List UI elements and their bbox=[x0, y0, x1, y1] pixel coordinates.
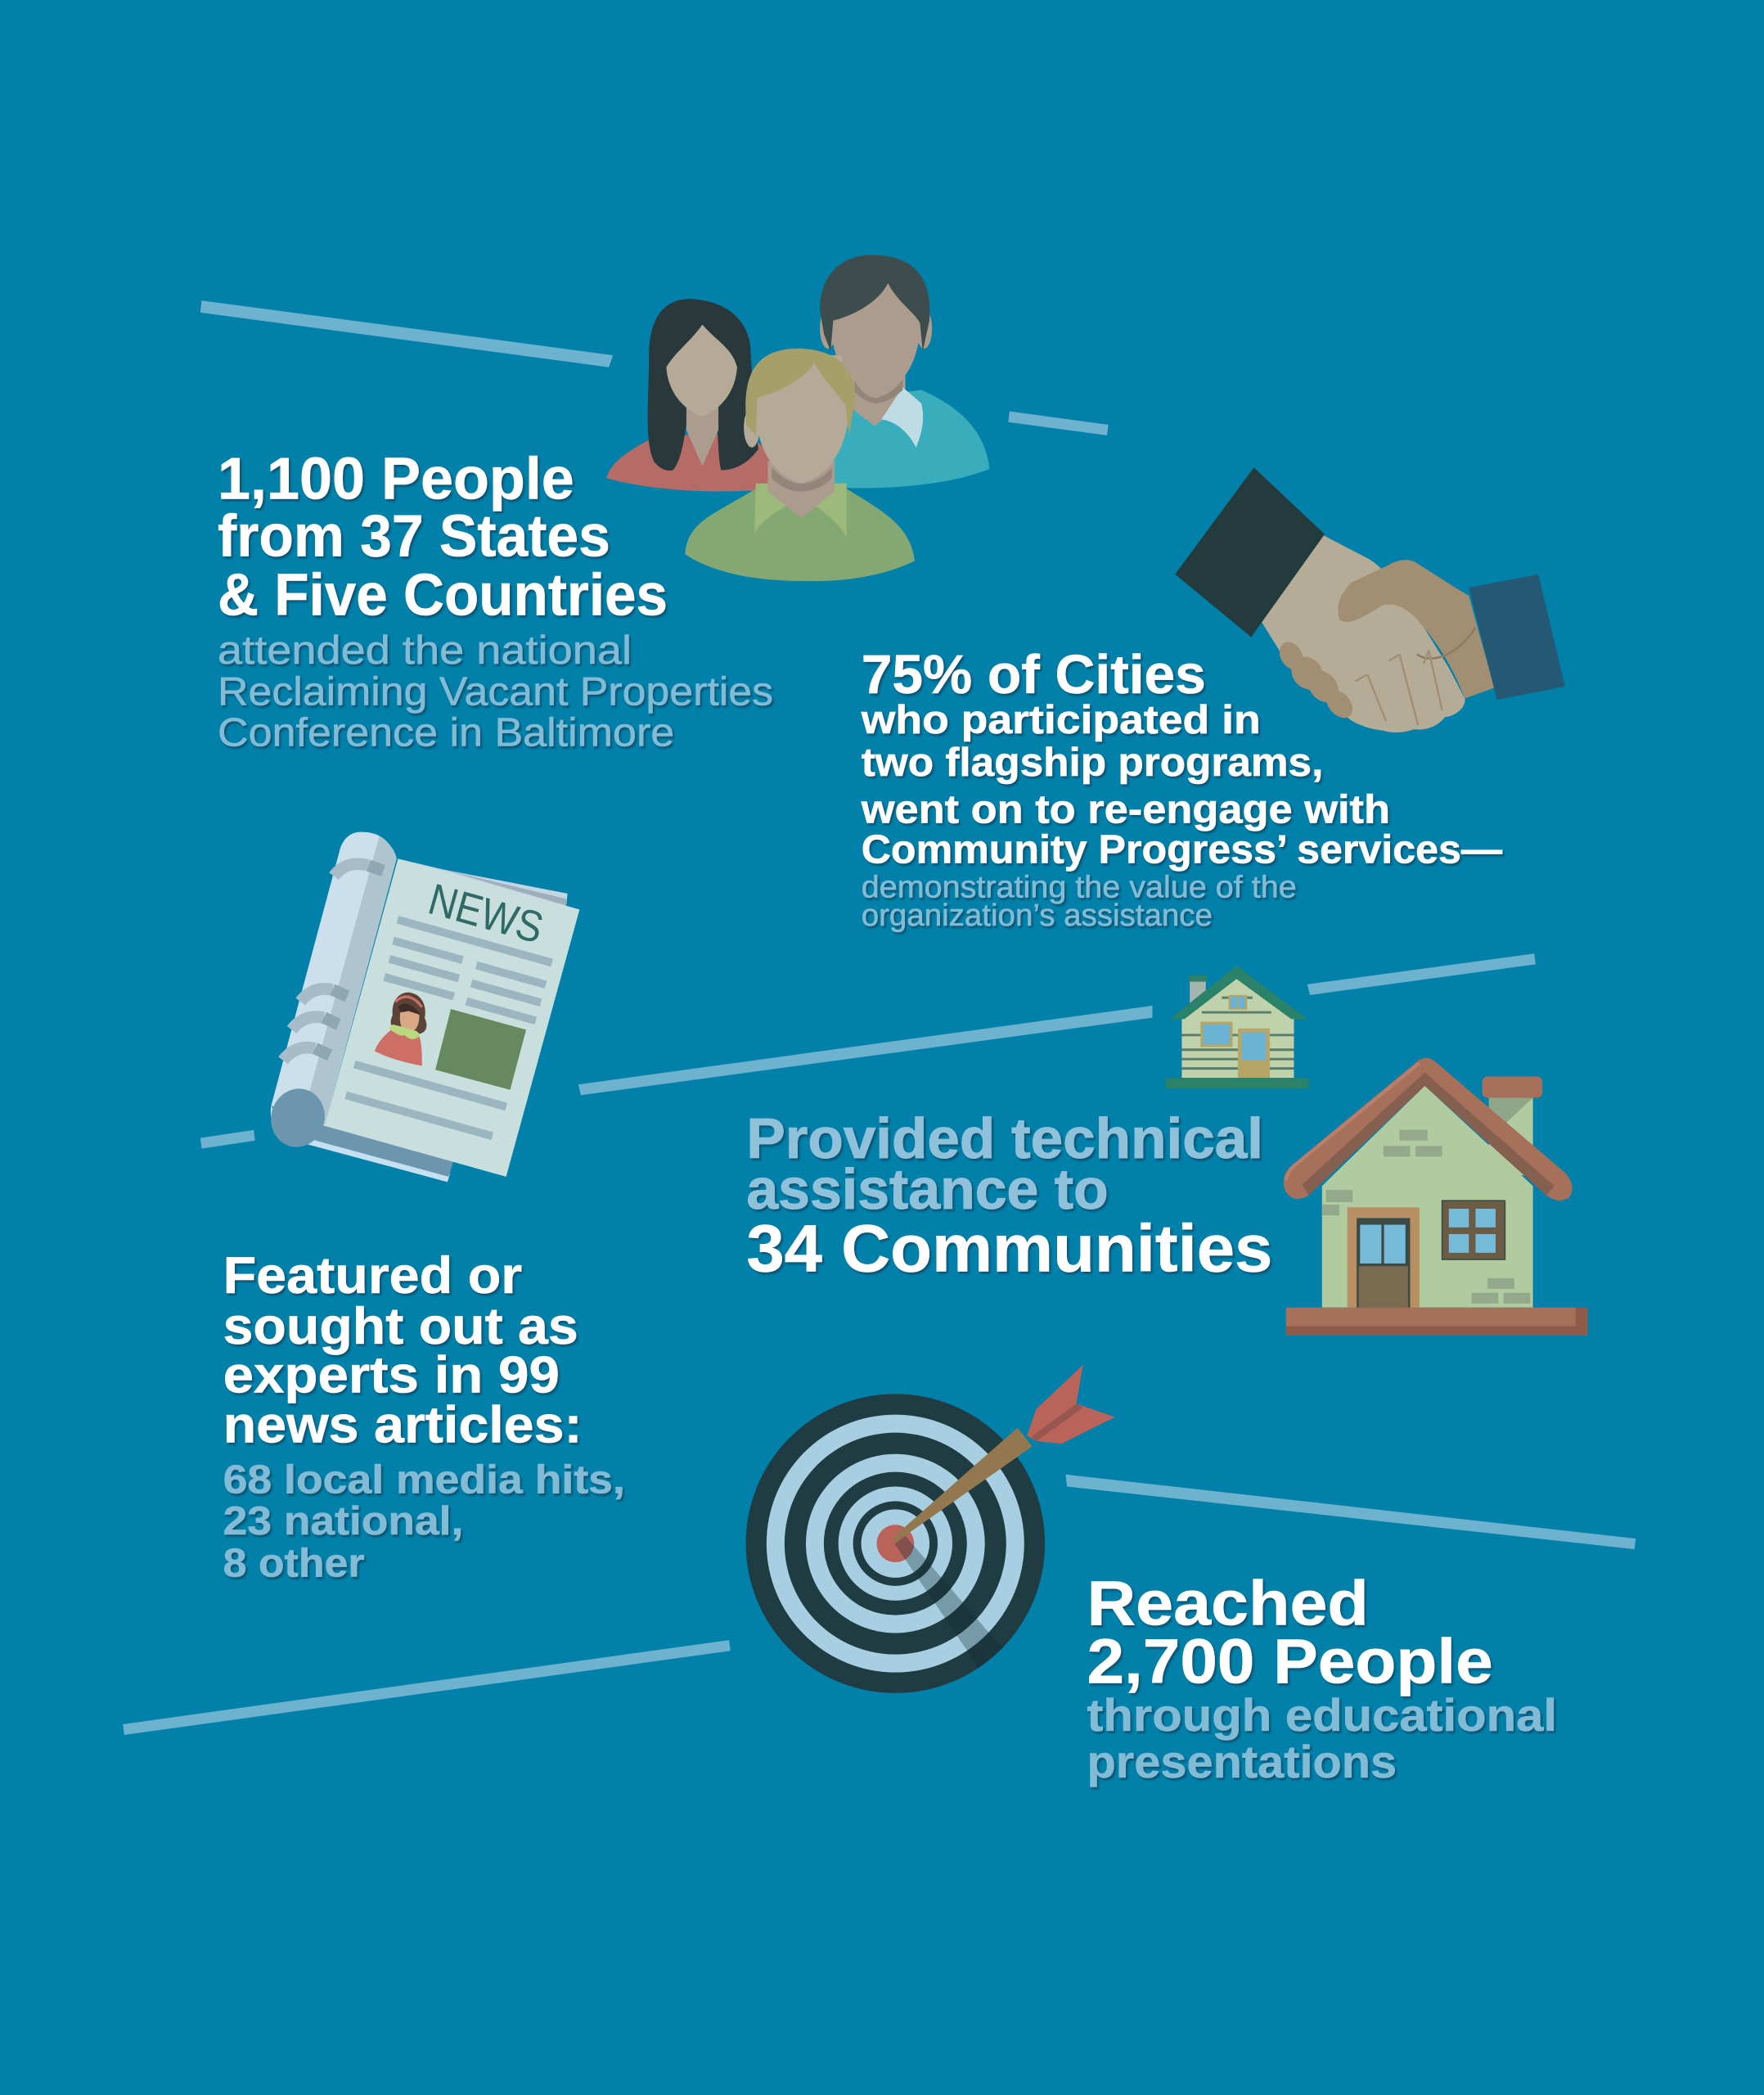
man in teal shirt bbox=[761, 255, 989, 488]
subtext: Reclaiming Vacant Properties bbox=[218, 670, 773, 714]
body: who participated in bbox=[861, 698, 1261, 742]
heading: from 37 States bbox=[218, 503, 610, 570]
masthead: NEWS bbox=[423, 875, 548, 953]
breakdown: 68 local media hits, bbox=[223, 1458, 625, 1503]
portrait of a woman bbox=[375, 993, 426, 1066]
windows and door bbox=[1229, 995, 1247, 1010]
rings bbox=[746, 1394, 1045, 1693]
heading bbox=[223, 1247, 583, 1454]
roof bbox=[1170, 966, 1307, 1019]
body: Community Progress’ services— bbox=[862, 827, 1502, 872]
heading bbox=[218, 446, 668, 628]
text block: 1,100 people bbox=[218, 446, 773, 755]
heading: 2,700 People bbox=[1087, 1627, 1493, 1696]
subtext bbox=[1087, 1690, 1557, 1787]
icon: large house bbox=[1284, 1058, 1588, 1336]
icon: three people bbox=[606, 255, 989, 581]
figure: 34 Communities bbox=[746, 1212, 1272, 1286]
man in green shirt bbox=[685, 349, 915, 581]
heading bbox=[1087, 1569, 1493, 1696]
walls bbox=[1181, 976, 1294, 1078]
diagonal rule: left of target bbox=[123, 1640, 731, 1735]
icon: newspaper bbox=[264, 832, 579, 1182]
subtext: Conference in Baltimore bbox=[218, 710, 674, 755]
breakdown: 8 other bbox=[223, 1542, 365, 1586]
heading: 1,100 People bbox=[218, 446, 574, 512]
subtext: attended the national bbox=[218, 628, 632, 673]
subtext: organization’s assistance bbox=[862, 898, 1213, 932]
heading: Featured or bbox=[223, 1247, 522, 1304]
walls bbox=[1322, 1086, 1533, 1308]
breakdown: 23 national, bbox=[223, 1499, 463, 1543]
heading: sought out as bbox=[223, 1298, 578, 1355]
subtext: presentations bbox=[1087, 1737, 1397, 1787]
news page content bbox=[344, 867, 566, 1143]
subtext bbox=[218, 628, 773, 755]
text block: 75% of cities bbox=[861, 644, 1502, 932]
diagonal rule: top left bbox=[200, 300, 613, 367]
heading: Reached bbox=[1087, 1569, 1369, 1638]
photo block bbox=[435, 1009, 526, 1090]
lead-in: assistance to bbox=[746, 1157, 1109, 1221]
woman in red shirt bbox=[606, 299, 775, 491]
chimney bbox=[1190, 980, 1206, 1010]
heading: news articles: bbox=[223, 1397, 583, 1454]
diagonal rule: right of people bbox=[1008, 412, 1109, 435]
diagonal rule: left of newspaper bbox=[200, 1130, 255, 1149]
diagonal rule: right of target bbox=[1065, 1475, 1636, 1549]
heading: & Five Countries bbox=[218, 562, 668, 628]
body: two flagship programs, bbox=[862, 741, 1323, 785]
door bbox=[1348, 1207, 1420, 1308]
diagonal rule: middle, right of small house bbox=[1307, 953, 1536, 995]
icon: target with arrow bbox=[746, 1365, 1115, 1693]
subtext: through educational bbox=[1087, 1690, 1557, 1741]
infographic canvas bbox=[123, 255, 1636, 1791]
window bbox=[1442, 1201, 1505, 1259]
arrow shadow bbox=[895, 1536, 1002, 1668]
arrow shaft bbox=[893, 1428, 1033, 1544]
text block: technical assistance bbox=[746, 1106, 1272, 1286]
base bbox=[1286, 1308, 1588, 1336]
subtext: demonstrating the value of the bbox=[862, 870, 1297, 904]
icon: handshake bbox=[1175, 467, 1565, 732]
icon: small green house bbox=[1166, 966, 1308, 1088]
text block: news articles bbox=[223, 1247, 625, 1586]
body bbox=[861, 698, 1502, 872]
heading: experts in 99 bbox=[223, 1346, 560, 1403]
lead-in: Provided technical bbox=[746, 1106, 1263, 1170]
roof bbox=[1284, 1058, 1573, 1201]
chimney bbox=[1489, 1095, 1533, 1175]
heading: 75% of Cities bbox=[862, 644, 1206, 705]
text block: reached people bbox=[1087, 1569, 1557, 1787]
body: went on to re-engage with bbox=[861, 787, 1390, 831]
base bbox=[1166, 1078, 1308, 1088]
subtext bbox=[862, 870, 1297, 932]
diagonal rule: middle, left of small house bbox=[578, 1006, 1152, 1095]
breakdown bbox=[223, 1458, 625, 1586]
arrow fletching bbox=[1027, 1365, 1115, 1444]
lead-in bbox=[746, 1106, 1263, 1221]
bricks bbox=[1322, 1130, 1530, 1304]
